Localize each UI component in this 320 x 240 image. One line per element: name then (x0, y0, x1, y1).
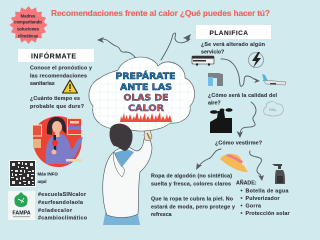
heading text (116, 70, 176, 114)
cloud panel: prepárate ante las olas de calor (89, 57, 195, 131)
badge: Madres compartiendo soluciones climáticas: compartiendo (14, 20, 42, 24)
text: calidad del aire: ¿Cómo será la calidad del (208, 93, 278, 99)
text: ropa de algodón (151, 174, 235, 218)
text: calidad del aire (208, 93, 278, 106)
text: añade list: Botella de agua (246, 188, 289, 194)
flames (120, 112, 172, 122)
logo: FAMPA: FAMPA (12, 210, 31, 216)
text: añade list: Protección solar (246, 211, 290, 217)
hashtags: #surfeandolaola (38, 200, 83, 206)
icon: warning triangle (62, 80, 78, 93)
hashtags: #oladecalor (38, 208, 72, 214)
icon: electricity bolt (248, 52, 264, 68)
text: duración (30, 96, 84, 110)
text: servicio (201, 42, 265, 56)
text: ropa de algodón: Que la ropa te cubra la piel. No (151, 196, 234, 202)
icon: smoke stack (210, 108, 232, 133)
illustration: reporter (32, 116, 83, 167)
heading text: CALOR (128, 104, 164, 114)
arrow: title to informate (97, 37, 138, 60)
icon: plane (262, 74, 286, 85)
text: pronóstico: las recomendaciones (30, 74, 87, 80)
badge: Madres compartiendo soluciones climáticas (10, 6, 48, 44)
icon: CO2 cloud (264, 102, 283, 116)
text: cómo vestirme: ¿Cómo vestirme? (215, 140, 262, 146)
illustration: person writing (103, 124, 152, 225)
title: Recomendaciones frente al calor ¿Qué puedes hacer tú? (51, 8, 270, 18)
text: servicio: ¿Se verá alterado algún (201, 42, 265, 48)
heading: informate: INFÓRMATE (31, 52, 76, 60)
text: más info aquí: Más INFO (38, 172, 58, 176)
heading: planifica: PLANIFICA (210, 30, 248, 37)
logo: FAMPA (8, 191, 35, 220)
text: ropa de algodón: suelta y fresca, colores claros (151, 182, 231, 188)
hashtags: #cambioclimático (38, 216, 88, 222)
text: más info aquí (38, 172, 58, 184)
text: pronóstico: sanitarias (30, 81, 55, 87)
arrow: vestirme to ropa (196, 149, 221, 170)
text: duración: ¿Cuánto tiempo es (30, 96, 80, 102)
text: ropa de algodón: refresca (151, 212, 172, 218)
badge: Madres compartiendo soluciones climáticas: climáticas (18, 34, 39, 38)
icon: sun hat (220, 154, 248, 172)
heading text: OLAS DE (124, 94, 168, 104)
text: ropa de algodón: Ropa de algodón (no sintética) (151, 174, 232, 180)
heading: planifica (196, 25, 271, 39)
arrow: cloud to planifica (161, 33, 191, 60)
text: pronóstico (30, 66, 92, 87)
panel: informate (18, 49, 94, 110)
text: añade list: Pulverizador (246, 196, 280, 202)
arrow: hat to spray (250, 151, 264, 181)
icon: bus (192, 56, 214, 66)
text: añade list: AÑADE: (236, 180, 257, 186)
badge: Madres compartiendo soluciones climáticas: Madres (21, 14, 36, 18)
arrow: aire down (236, 102, 256, 138)
icon: spray bottle (272, 164, 285, 184)
icon: faucet water (208, 73, 223, 86)
hashtags: #escuelaSINcalor (38, 192, 86, 198)
arrow: bus to plane (221, 59, 260, 86)
heading text: PREPÁRATE (116, 70, 176, 82)
text: servicio: servicio? (201, 50, 224, 56)
qr code (9, 160, 36, 187)
text: pronóstico: Conoce el pronóstico y (30, 66, 92, 72)
badge: Madres compartiendo soluciones climáticas: soluciones (17, 26, 40, 32)
hashtags (38, 192, 88, 222)
text: ropa de algodón: estará de moda, pero protege y (151, 204, 235, 210)
heading text: ANTE LAS (120, 83, 172, 93)
text: añade list (236, 180, 290, 217)
icon: CO2 cloud: CO₂ (269, 108, 277, 112)
text: añade list: Gorra (246, 204, 261, 210)
text: duración: probable que dure? (30, 104, 84, 110)
text: más info aquí: aquí (38, 179, 47, 184)
text: calidad del aire: aire? (208, 100, 221, 106)
panel: planifica (151, 25, 290, 218)
